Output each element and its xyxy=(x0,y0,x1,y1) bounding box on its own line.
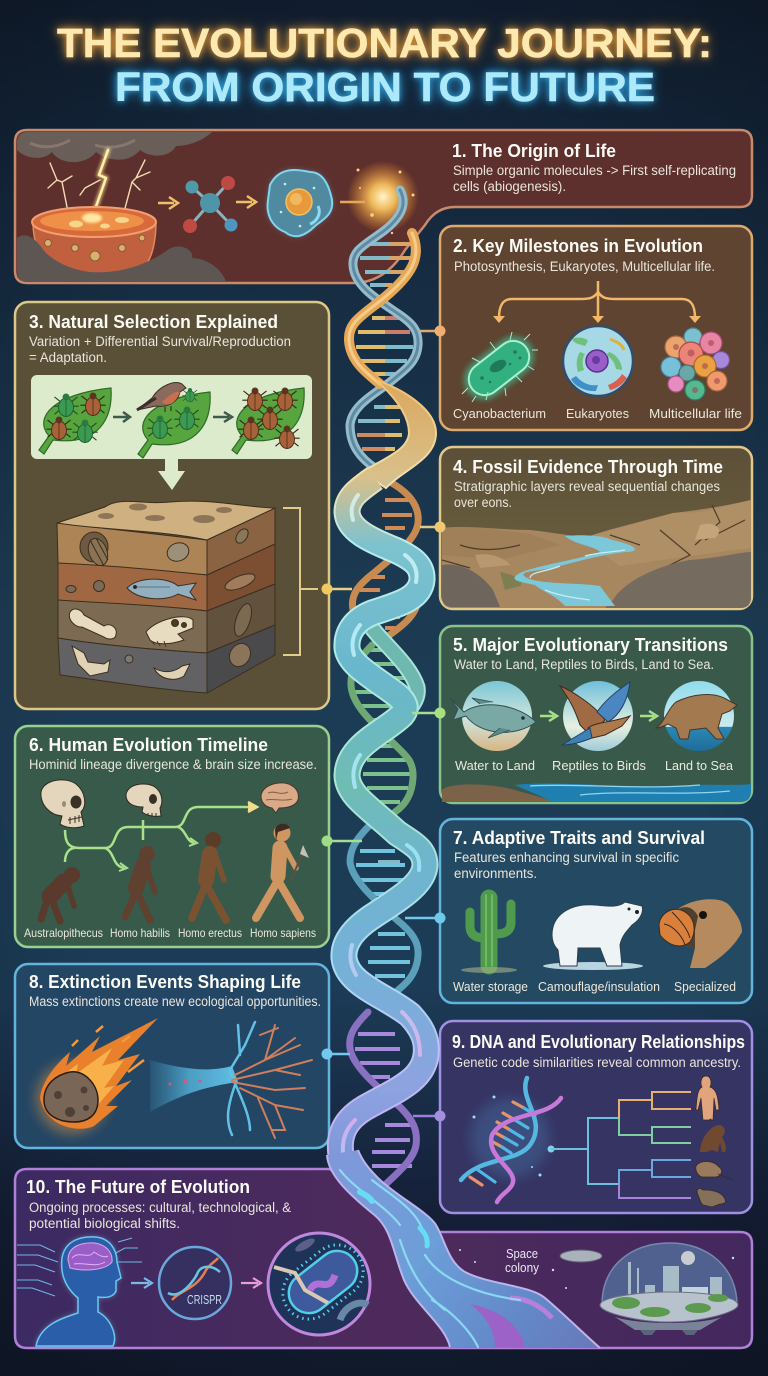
icon: molecule xyxy=(183,176,238,233)
icon: lightning bolts xyxy=(48,150,150,218)
connector: panel 3 xyxy=(322,584,352,594)
arrow xyxy=(236,196,256,208)
label: space colony: Space xyxy=(506,1247,538,1261)
panel: 6 human evolution xyxy=(15,726,329,947)
text block: environments. xyxy=(454,866,537,881)
arrow xyxy=(113,412,130,422)
bracket xyxy=(283,508,318,655)
icon: primordial soup cauldron xyxy=(32,207,156,276)
icon: skull later xyxy=(126,784,162,816)
icon: animal land to sea xyxy=(656,681,737,751)
icon: head with neural circuits xyxy=(17,1237,142,1346)
connector: panel 6 xyxy=(322,836,362,846)
labels: Water to Land xyxy=(455,758,535,773)
thin strands xyxy=(350,482,418,1185)
icon: rodent xyxy=(696,1162,733,1180)
icon: CRISPR circle xyxy=(159,1247,231,1319)
icon: first cell xyxy=(268,170,332,236)
icon: cyanobacterium xyxy=(456,328,542,408)
text block: Features enhancing survival in specific xyxy=(454,850,679,865)
glow origin xyxy=(340,161,419,234)
text block xyxy=(29,334,291,365)
text block: Genetic code similarities reveal common ancestry. xyxy=(453,1055,741,1070)
panel: 3 natural selection xyxy=(15,302,329,709)
icon: Homo sapiens xyxy=(256,824,309,918)
icon: fossil jaw bones xyxy=(72,646,190,679)
icon: polar bear xyxy=(543,902,643,970)
icon: bird with specialized beak xyxy=(659,899,742,968)
title: THE EVOLUTIONARY JOURNEY: xyxy=(57,20,712,66)
ribbon first lobe xyxy=(362,380,436,488)
icon: ape xyxy=(700,1125,726,1152)
selection strip xyxy=(31,375,312,459)
title: FROM ORIGIN TO FUTURE xyxy=(115,64,655,110)
connector: panel 2 xyxy=(420,326,446,336)
title xyxy=(57,20,712,110)
icon: gene edited microbe xyxy=(268,1233,374,1335)
text block xyxy=(454,479,720,510)
labels: Camouflage/insulation xyxy=(538,979,660,994)
labels: Homo habilis xyxy=(110,926,170,940)
labels: Multicellular life xyxy=(649,406,742,421)
icon: meteor with flame xyxy=(36,1018,158,1134)
icon: trilobite xyxy=(80,532,111,568)
panel: 7 adaptive traits xyxy=(440,819,752,1003)
upper blue strand xyxy=(350,190,418,468)
illustration: shore and water xyxy=(442,784,751,802)
label: space colony xyxy=(505,1247,540,1275)
icon: leaf with mixed beetles xyxy=(39,388,111,454)
labels: Eukaryotes xyxy=(566,406,629,421)
text block: Mass extinctions create new ecological opportunities. xyxy=(29,994,321,1009)
arrow: down xyxy=(158,459,185,490)
heading: 7. Adaptive Traits and Survival xyxy=(453,827,705,848)
phylogenetic tree xyxy=(548,1092,691,1198)
title: THE EVOLUTIONARY JOURNEY: xyxy=(57,20,712,66)
labels: Australopithecus xyxy=(24,926,103,940)
icon: space colony dome xyxy=(600,1243,738,1335)
heading: 3. Natural Selection Explained xyxy=(29,311,278,332)
text block: Photosynthesis, Eukaryotes, Multicellular life. xyxy=(454,259,715,274)
icon: rock strata block xyxy=(57,501,275,693)
text block: = Adaptation. xyxy=(29,350,107,365)
heading: 6. Human Evolution Timeline xyxy=(29,734,268,755)
labels xyxy=(24,926,316,940)
icon: fossil dinosaur skull xyxy=(146,617,193,647)
panel: 2 key milestones xyxy=(440,226,752,430)
panel: 4 fossil evidence xyxy=(440,447,752,609)
icon: bird reptiles to birds xyxy=(560,681,633,751)
arrow xyxy=(131,1278,152,1288)
text block: Simple organic molecules -> First self-replicating xyxy=(453,163,736,178)
panel: 8 extinction events xyxy=(15,964,329,1148)
text block: Variation + Differential Survival/Reproduction xyxy=(29,334,291,349)
text block: potential biological shifts. xyxy=(29,1216,180,1231)
labels: Specialized xyxy=(674,979,736,994)
main ribbon xyxy=(340,478,426,1165)
icon: eukaryote cell xyxy=(563,326,633,396)
branching arrows xyxy=(65,802,257,871)
panel: 5 major transitions xyxy=(440,626,752,803)
icon: DNA double helix xyxy=(461,1078,561,1202)
icon: branching tree of life xyxy=(150,1022,312,1138)
connector: panel 7 xyxy=(405,912,446,924)
panel: 10 future of evolution xyxy=(15,1169,752,1348)
icon: CRISPR circle: CRISPR xyxy=(187,1292,222,1307)
labels: Reptiles to Birds xyxy=(552,758,646,773)
upper orange strand xyxy=(349,233,416,384)
heading: 2. Key Milestones in Evolution xyxy=(453,235,703,256)
connector: panel 4 xyxy=(420,522,446,532)
DNA spine xyxy=(327,161,600,1348)
labels: Land to Sea xyxy=(665,758,734,773)
text block: Stratigraphic layers reveal sequential changes xyxy=(454,479,720,494)
title: FROM ORIGIN TO FUTURE xyxy=(115,64,655,110)
icon: Homo habilis xyxy=(125,846,155,920)
icon: fossil bone xyxy=(69,609,116,639)
panel: 9 DNA relationships xyxy=(440,1021,752,1213)
labels: Homo sapiens xyxy=(250,926,316,940)
icon: storm cloud xyxy=(17,132,212,162)
icon: human xyxy=(696,1076,719,1120)
text block xyxy=(29,1200,291,1231)
icon: skull early xyxy=(41,780,85,828)
heading: 10. The Future of Evolution xyxy=(26,1176,250,1197)
river flowing into future xyxy=(327,1150,600,1348)
icon: flying saucer xyxy=(560,1250,602,1262)
icon: multicellular cluster xyxy=(661,328,730,400)
heading: 1. The Origin of Life xyxy=(452,140,616,161)
text block xyxy=(453,163,736,194)
branching arrows xyxy=(493,281,701,323)
icon: leaf with brown beetles xyxy=(232,388,304,454)
arrow xyxy=(540,711,557,721)
text block: Ongoing processes: cultural, technological, & xyxy=(29,1200,291,1215)
labels xyxy=(453,406,742,421)
icon: smoke xyxy=(17,235,226,282)
text block: cells (abiogenesis). xyxy=(453,179,566,194)
title: FROM ORIGIN TO FUTURE xyxy=(115,64,655,110)
icon: cactus xyxy=(461,895,517,973)
labels: Homo erectus xyxy=(178,926,242,940)
icon: fossil fish xyxy=(127,579,196,600)
connector: panel 8 xyxy=(322,1048,350,1060)
connector: panel 9 xyxy=(413,1110,446,1122)
icon: leaf with bird eating beetle xyxy=(137,383,210,458)
stars xyxy=(459,1249,734,1289)
text block: Hominid lineage divergence & brain size increase. xyxy=(29,757,317,772)
labels: Water storage xyxy=(453,979,528,994)
icon: brain xyxy=(261,783,298,813)
text block: over eons. xyxy=(454,495,512,510)
connector: panel 5 xyxy=(412,708,446,718)
arrow xyxy=(213,412,232,422)
icon: fish water to land xyxy=(450,681,536,751)
labels xyxy=(455,758,734,773)
icon: Homo erectus xyxy=(192,832,226,920)
arrow xyxy=(158,197,178,209)
text block: Water to Land, Reptiles to Birds, Land to Sea. xyxy=(454,657,714,672)
heading: 5. Major Evolutionary Transitions xyxy=(453,634,728,655)
icon: eroded landscape with river xyxy=(442,500,751,608)
labels: Cyanobacterium xyxy=(453,406,546,421)
labels xyxy=(453,979,736,994)
rungs xyxy=(355,244,413,1166)
title: THE EVOLUTIONARY JOURNEY: xyxy=(57,20,712,66)
icon: small mammal xyxy=(697,1188,726,1207)
heading: 8. Extinction Events Shaping Life xyxy=(29,971,301,992)
icon: Australopithecus xyxy=(41,867,80,921)
text block xyxy=(454,850,679,881)
panel: 1 origin of life xyxy=(15,130,752,283)
second ribbon xyxy=(372,628,417,732)
heading: 4. Fossil Evidence Through Time xyxy=(453,456,723,477)
arrow xyxy=(640,711,657,721)
label: space colony: colony xyxy=(505,1261,540,1275)
arrow xyxy=(241,1278,261,1288)
